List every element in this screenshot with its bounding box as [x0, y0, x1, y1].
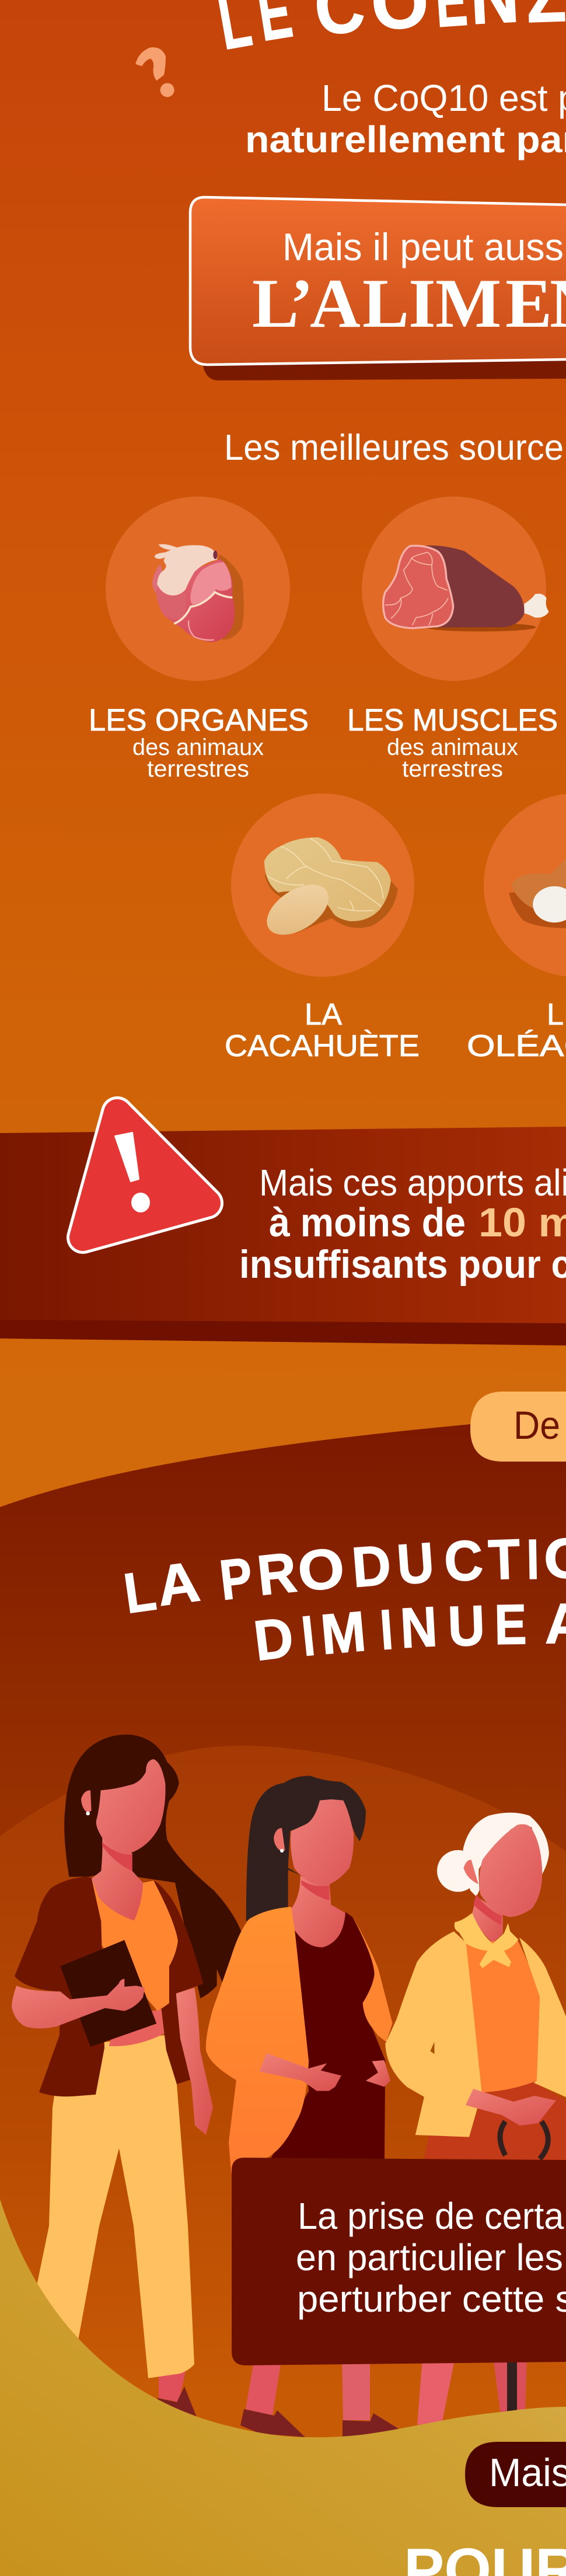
trousers	[36, 2035, 194, 2378]
upper body	[12, 1735, 241, 2135]
ear	[274, 1828, 285, 1851]
note line three: perturber cette s	[297, 2278, 566, 2320]
woman 3	[385, 1813, 566, 2425]
section: dark background	[0, 1415, 566, 2576]
cane	[507, 2357, 517, 2413]
band panel	[0, 1127, 566, 1323]
band shadow	[0, 1317, 566, 1345]
legs	[417, 2357, 455, 2425]
icon: oilseeds	[509, 859, 566, 928]
hand	[366, 2060, 390, 2087]
icon: peanut	[258, 837, 398, 945]
warning band	[0, 1127, 566, 1345]
label: peanut: LA	[305, 998, 342, 1032]
title: le coenzyme	[212, 0, 566, 65]
ear	[81, 1790, 92, 1813]
circle: oilseeds	[484, 794, 566, 977]
icon: heart	[152, 544, 244, 642]
hair	[246, 1776, 366, 1921]
hands	[466, 2089, 556, 2126]
label: muscles: terrestres	[402, 756, 503, 782]
hair bun	[437, 1850, 479, 1892]
upper body	[206, 1776, 393, 2173]
title: production declines: I	[299, 1603, 318, 1668]
gold wave	[0, 2199, 566, 2576]
intro text: naturellement par	[245, 118, 566, 160]
ankle	[159, 2369, 186, 2402]
box panel	[190, 197, 566, 365]
earring	[280, 1849, 284, 1853]
title: production declines: P	[216, 1546, 256, 1612]
title: production declines: C	[442, 1528, 485, 1594]
neck shadow	[301, 1880, 330, 1900]
face	[479, 1824, 542, 1917]
label: muscles	[347, 703, 558, 782]
midriff	[109, 2009, 165, 2046]
title: production declines: N	[399, 1595, 439, 1660]
shoe	[156, 2386, 198, 2427]
title: production declines: E	[494, 1593, 527, 1657]
vest	[466, 1939, 540, 2092]
box line one: Mais il peut auss	[282, 225, 564, 268]
pill: but tag	[465, 2442, 566, 2507]
note line two: en particulier les	[296, 2236, 563, 2278]
ear	[464, 1860, 478, 1884]
skirt	[422, 2082, 566, 2165]
label: muscles: LES MUSCLES	[347, 703, 558, 738]
face	[291, 1799, 354, 1886]
hair	[463, 1813, 549, 1896]
label: peanut: CACAHUÈTE	[225, 1029, 420, 1063]
neck	[92, 1836, 143, 1921]
pill: intro tag: De	[513, 1403, 560, 1448]
panel: medication note	[232, 2158, 566, 2365]
forearm	[260, 2053, 341, 2091]
upper body	[385, 1813, 566, 2137]
face	[96, 1759, 166, 1854]
band line two: à moins de	[269, 1200, 466, 1245]
title: production declines: L	[120, 1558, 160, 1626]
circle: muscles	[362, 497, 546, 681]
title: production declines: A	[153, 1550, 203, 1618]
intro text	[245, 77, 566, 160]
box shadow	[202, 357, 566, 380]
icon: question mark	[135, 47, 174, 97]
jacket right	[153, 1881, 203, 2084]
pocket	[430, 2042, 434, 2054]
label: oilseeds	[467, 998, 566, 1063]
label: muscles: des animaux	[387, 735, 518, 760]
icon: warning triangle	[83, 1113, 207, 1238]
circle: peanut	[231, 794, 414, 977]
woman 2	[206, 1776, 401, 2437]
subheading: best sources: Les meilleures source	[224, 428, 564, 468]
label: organs	[89, 703, 309, 782]
title: production declines: I	[378, 1597, 395, 1662]
arm right	[176, 1988, 213, 2135]
title: production declines	[120, 1527, 566, 1673]
neck shadow	[473, 1895, 502, 1925]
sleeve	[352, 1916, 393, 2042]
neck shadow	[102, 1842, 132, 1871]
jacket left	[15, 1877, 104, 2096]
label: peanut	[225, 998, 420, 1063]
title: production declines: U	[395, 1530, 436, 1596]
icon: ham	[383, 546, 549, 631]
legs	[246, 2357, 282, 2416]
title: production declines: D	[250, 1605, 297, 1673]
callout: food source box	[190, 197, 566, 380]
earring	[86, 1812, 90, 1815]
pill: intro tag	[470, 1392, 566, 1462]
shoes	[240, 2409, 305, 2437]
jacket left	[385, 1931, 482, 2137]
title: production declines: T	[487, 1528, 521, 1592]
shirt	[92, 1879, 178, 2011]
circle: organs	[106, 497, 290, 681]
title: production declines: M	[318, 1599, 368, 1666]
cane handle	[500, 2121, 548, 2159]
cardigan	[206, 1907, 309, 2173]
scarf	[455, 1913, 518, 1968]
title: production declines: I	[526, 1527, 540, 1591]
hair	[64, 1735, 241, 1998]
label: organs: terrestres	[147, 756, 249, 782]
dress	[267, 1912, 385, 2165]
arm with hand	[12, 1979, 145, 2029]
section: lighter dome	[0, 1746, 566, 2576]
neck	[291, 1876, 345, 1947]
title: production declines: U	[447, 1593, 486, 1658]
jacket right	[519, 1938, 566, 2099]
neck	[472, 1896, 503, 1944]
title: production declines: O	[295, 1536, 347, 1603]
title: production declines: R	[254, 1540, 299, 1607]
title: production declines: D	[350, 1533, 393, 1599]
woman 1	[12, 1735, 241, 2427]
label: organs: LES ORGANES	[89, 703, 309, 738]
book	[60, 1940, 156, 2047]
label: organs: des animaux	[132, 735, 264, 760]
